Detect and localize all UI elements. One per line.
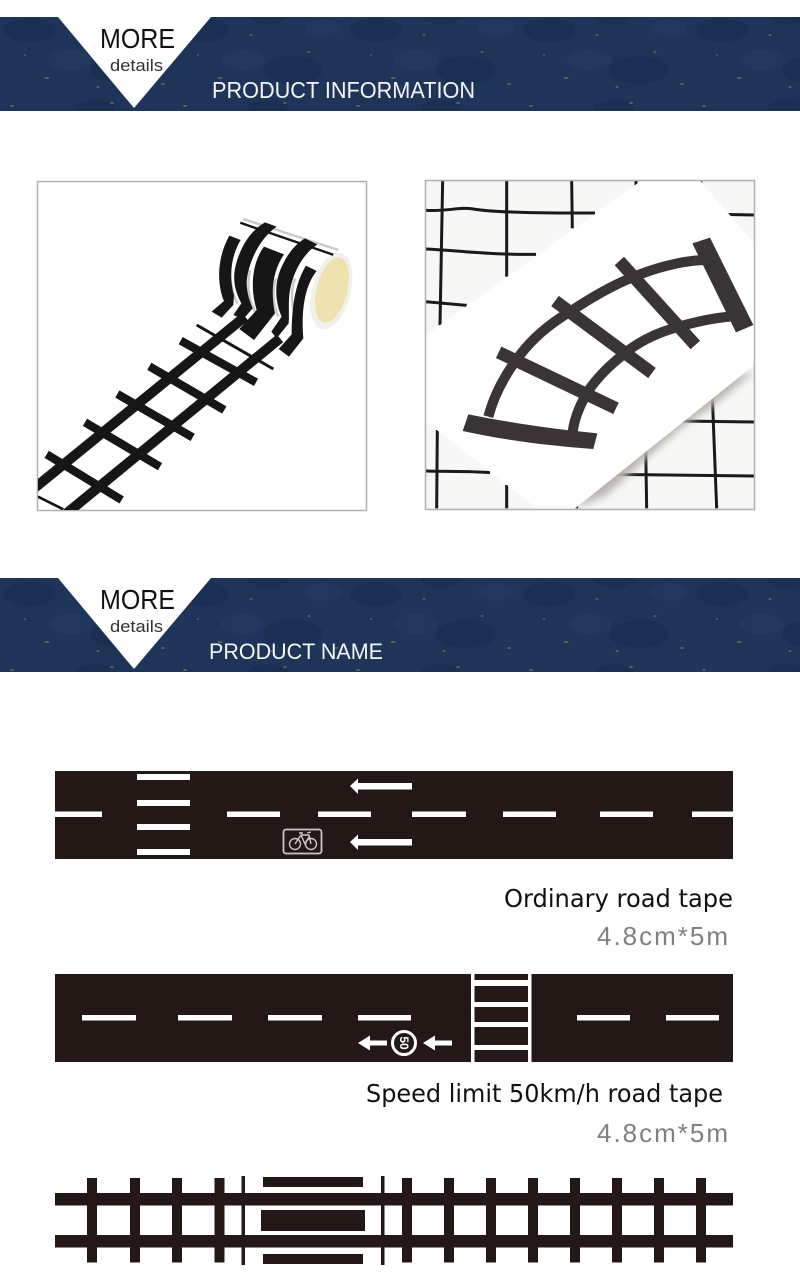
white triangle notch [58,17,211,108]
middle sleepers [499,261,695,408]
section title: product name: PRODUCT NAME [209,639,383,664]
sleepers [87,1178,706,1262]
road tape: ordinary [55,771,733,951]
section title: product information: PRODUCT INFORMATION [212,77,475,103]
road tape: speed limit 50 [55,974,733,1148]
railway tape [55,1176,733,1265]
tape roll illustration [30,219,360,513]
arrow: lower lane [350,834,412,850]
icon: bicycle sign [284,830,322,854]
panel: railway tape roll photo [30,182,366,513]
white triangle notch [58,578,211,669]
white tape backing [425,180,754,508]
arrow: upper lane [350,778,412,794]
heading: MORE: MORE [100,23,175,54]
silver film edges [230,219,338,322]
rails [55,1193,733,1206]
banner: product name [0,578,800,672]
icon: speed limit 50 sign [392,1032,416,1054]
heading: MORE: MORE [100,584,175,615]
banner: product information [0,17,800,111]
sub-heading: details: details [110,56,163,75]
shadow beneath tape [575,372,754,508]
centre dashes [55,812,733,817]
end sleepers [463,414,597,449]
roll outer face [310,252,352,330]
label: size: 4.8cm*5m [597,921,728,951]
thin platform markers [242,1176,384,1265]
station platform bars [261,1177,365,1264]
curved rails [488,260,730,432]
sub-heading: details: details [110,617,163,636]
roll strips [212,222,334,357]
arrow: right of sign [423,1036,452,1050]
centre dashes [82,1015,719,1020]
icon: speed limit 50 sign: 50 [397,1036,411,1050]
arrow: left of sign [358,1036,387,1050]
rail lines [30,317,280,513]
sleepers: outer stubs and inner links [47,341,256,500]
fabric grid lines [425,180,754,508]
label: speed limit road tape: Speed limit 50km/h road tape [366,1079,723,1108]
label: size: 4.8cm*5m [597,1118,728,1148]
crossing ladder [471,974,532,1062]
panel: curved rail tape photo [425,180,755,510]
pedestrian crossing bars [137,774,190,855]
label: ordinary road tape: Ordinary road tape [504,884,733,913]
